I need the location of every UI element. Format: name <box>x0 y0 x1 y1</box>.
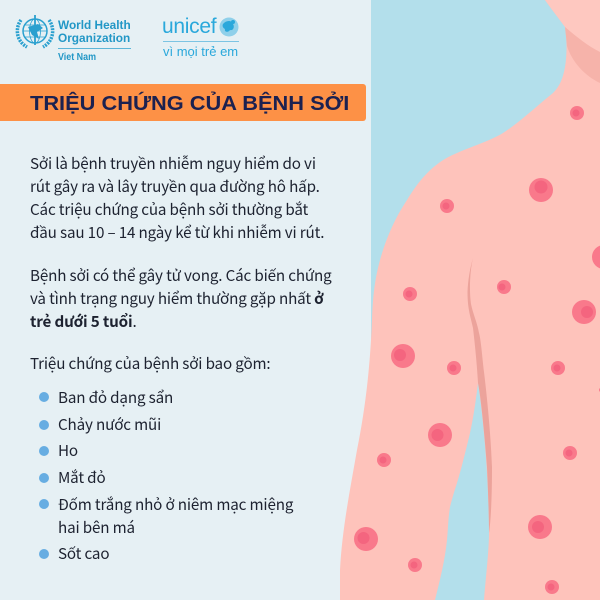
intro paragraph: Các triệu chứng của bệnh sởi thường bắt <box>30 198 308 220</box>
symptom list: Mắt đỏ <box>58 466 106 488</box>
complications paragraph: Bệnh sởi có thể gây tử vong. Các biến chứng <box>30 264 332 286</box>
complications paragraph <box>30 264 332 332</box>
intro paragraph <box>30 152 324 243</box>
complications paragraph: và tình trạng nguy hiểm thường gặp nhất ở <box>30 287 324 309</box>
complications paragraph: trẻ dưới 5 tuổi. <box>30 310 137 332</box>
logo: World Health Organization Viet Nam <box>16 15 131 63</box>
intro paragraph: đầu sau 10 – 14 ngày kể từ khi nhiễm vi rút. <box>30 221 324 243</box>
symptom list: Chảy nước mũi <box>58 413 161 435</box>
symptom list <box>39 386 294 564</box>
measles spots <box>354 106 600 594</box>
skin: shoulder, arm and torso <box>340 0 600 600</box>
symptom list: Ho <box>58 439 78 461</box>
neck shadow <box>565 27 600 83</box>
logo: World Health Organization Viet Nam: World Health <box>58 18 131 32</box>
chin <box>545 0 600 52</box>
logo: unicef <box>162 15 239 59</box>
armpit crease <box>468 258 492 533</box>
logo: World Health Organization Viet Nam: Organization <box>58 30 130 44</box>
gap between arm and torso <box>435 383 489 600</box>
symptom list: Đốm trắng nhỏ ở niêm mạc miệng <box>58 493 293 515</box>
symptom list: Sốt cao <box>58 542 109 564</box>
intro paragraph: Sởi là bệnh truyền nhiễm nguy hiểm do vi <box>30 152 316 174</box>
symptom list: hai bên má <box>58 516 135 538</box>
list heading: Triệu chứng của bệnh sởi bao gồm: <box>30 352 270 374</box>
logo: World Health Organization Viet Nam: Viet Nam <box>58 51 96 63</box>
intro paragraph: rút gây ra và lây truyền qua đường hô hấp. <box>30 175 320 197</box>
logo: unicef: unicef <box>162 15 216 38</box>
logo: unicef: vì mọi trẻ em <box>163 44 238 59</box>
symptom list: Ban đỏ dạng sẩn <box>58 386 173 408</box>
title: TRIỆU CHỨNG CỦA BỆNH SỞI <box>30 93 349 115</box>
title banner <box>0 84 366 121</box>
